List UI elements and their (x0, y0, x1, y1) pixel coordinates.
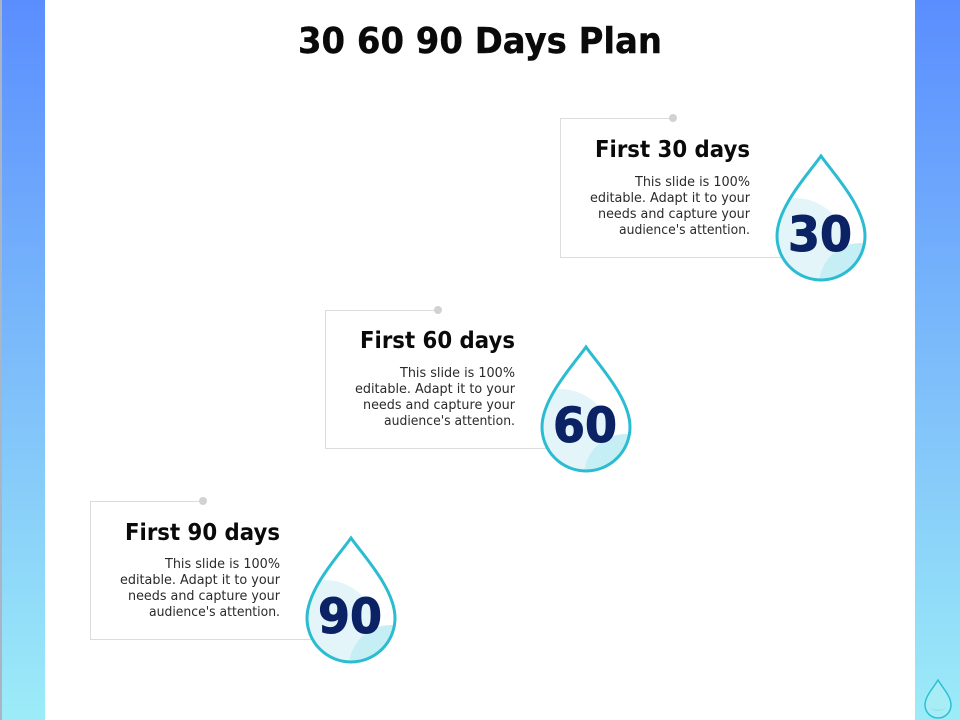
description text: audience's attention. (149, 605, 280, 620)
icon: water drop 60: 60 (553, 398, 617, 454)
icon: water drop 60 (540, 344, 632, 472)
heading: first 60 days: First 60 days (360, 328, 515, 354)
heading: first 30 days: First 30 days (595, 137, 750, 163)
description text: needs and capture your (598, 207, 751, 222)
right gradient sidebar (915, 0, 960, 720)
description text: editable. Adapt it to your (590, 191, 751, 206)
description text: This slide is 100% (634, 175, 750, 190)
description text: This slide is 100% (164, 557, 280, 572)
description text: audience's attention. (384, 414, 515, 429)
description text: editable. Adapt it to your (355, 382, 516, 397)
panel: first 90 days (90, 497, 396, 664)
description text (355, 366, 516, 429)
description text (590, 175, 751, 238)
icon: water drop 90: 90 (318, 589, 382, 645)
description text: editable. Adapt it to your (120, 573, 281, 588)
description text: needs and capture your (128, 589, 281, 604)
description text: audience's attention. (619, 223, 750, 238)
connector dot (434, 306, 442, 314)
icon: water drop 30: 30 (788, 207, 852, 263)
card outline (326, 310, 550, 448)
description text: This slide is 100% (399, 366, 515, 381)
icon: water drop 30 (776, 154, 866, 282)
title: 30 60 90 Days Plan (298, 21, 662, 62)
icon: small corner water drop (925, 680, 951, 718)
card outline (560, 118, 785, 258)
panel: first 30 days (560, 114, 866, 282)
description text: needs and capture your (363, 398, 516, 413)
heading: first 90 days: First 90 days (125, 520, 280, 546)
panel: first 60 days (325, 306, 632, 472)
card outline (90, 502, 315, 640)
connector dot (669, 114, 677, 122)
description text (120, 557, 281, 620)
connector dot (199, 497, 207, 505)
left gradient sidebar (0, 0, 45, 720)
icon: water drop 90 (306, 536, 396, 664)
